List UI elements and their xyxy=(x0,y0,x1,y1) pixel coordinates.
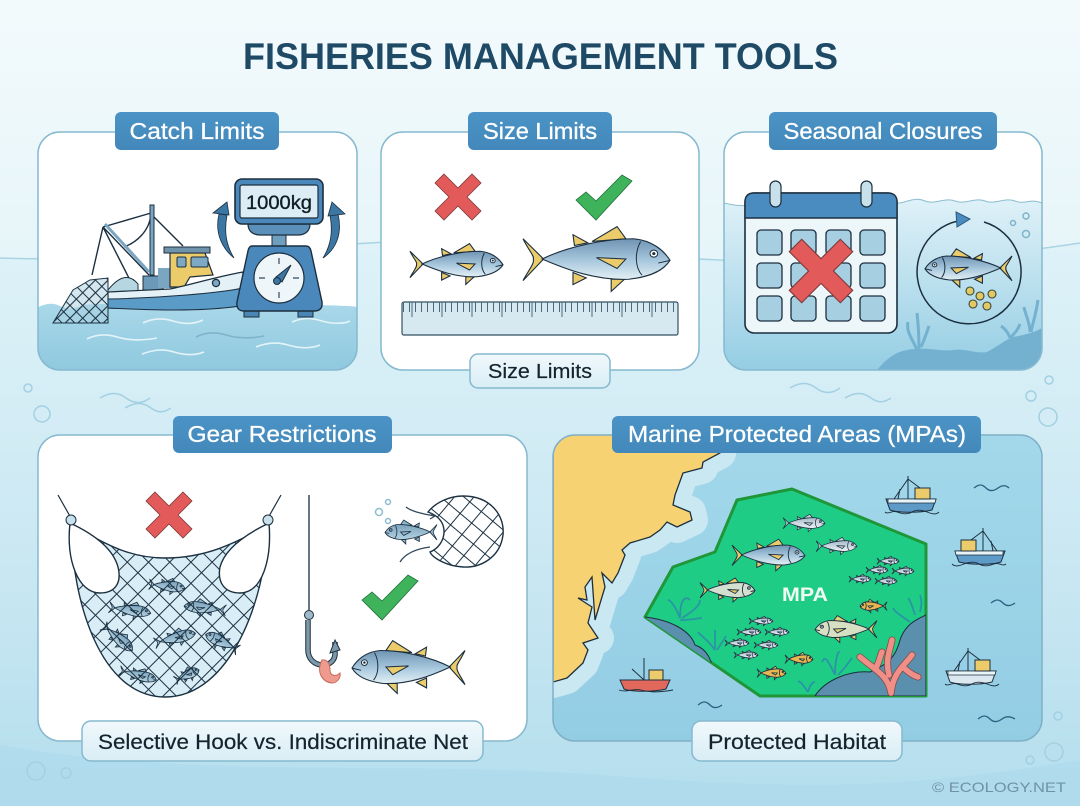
heading: size limits xyxy=(468,112,612,150)
panel: size limits xyxy=(381,112,699,388)
heading: catch limits xyxy=(115,112,279,150)
icon: weighing scale xyxy=(213,179,345,317)
panel: gear restrictions xyxy=(38,416,527,761)
icon: small fish escaping net xyxy=(376,496,503,567)
panel: marine protected areas xyxy=(553,416,1042,761)
heading: seasonal closures: Seasonal Closures xyxy=(784,118,982,144)
boats outside zone xyxy=(619,476,1006,692)
caption: size limits: Size Limits xyxy=(488,361,592,383)
copyright: © ECOLOGY.NET xyxy=(932,779,1067,795)
ruler xyxy=(402,302,678,335)
map: coastline xyxy=(553,430,725,682)
caption: size limits xyxy=(470,354,610,388)
caption: protected habitat xyxy=(692,721,902,761)
heading: gear restrictions: Gear Restrictions xyxy=(188,421,376,447)
label: MPA: MPA xyxy=(782,585,828,606)
small fish xyxy=(410,244,503,284)
heading: size limits: Size Limits xyxy=(483,118,597,144)
icon: spawning cycle xyxy=(917,212,1030,324)
icon: calendar with cross xyxy=(745,181,897,333)
map: protected zone xyxy=(640,489,926,696)
caption: selective hook vs net xyxy=(82,721,483,761)
water xyxy=(38,304,357,372)
caption: selective hook vs net: Selective Hook vs. Indiscriminate Net xyxy=(98,731,468,754)
caption: protected habitat: Protected Habitat xyxy=(708,731,886,754)
scale readout: 1000kg xyxy=(246,193,312,214)
icon: fishing trawler xyxy=(53,205,243,323)
heading: marine protected areas xyxy=(612,416,981,453)
title: FISHERIES MANAGEMENT TOOLS xyxy=(243,36,838,77)
wave marks xyxy=(698,485,1015,722)
icon: red cross xyxy=(435,174,481,220)
panel: seasonal closures xyxy=(724,112,1042,372)
heading: seasonal closures xyxy=(769,112,997,150)
panel: catch limits xyxy=(38,112,357,372)
heading: catch limits: Catch Limits xyxy=(130,118,264,144)
large fish on hook xyxy=(352,641,465,693)
icon: red cross xyxy=(146,492,192,538)
large fish xyxy=(523,227,670,291)
icon: hook with bait xyxy=(304,495,340,683)
heading: marine protected areas: Marine Protected Areas (MPAs) xyxy=(628,421,966,447)
icon: indiscriminate net xyxy=(58,495,281,697)
fish school xyxy=(700,514,914,680)
icon: green check xyxy=(362,575,418,620)
icon: green check xyxy=(576,175,632,220)
heading: gear restrictions xyxy=(173,416,392,453)
